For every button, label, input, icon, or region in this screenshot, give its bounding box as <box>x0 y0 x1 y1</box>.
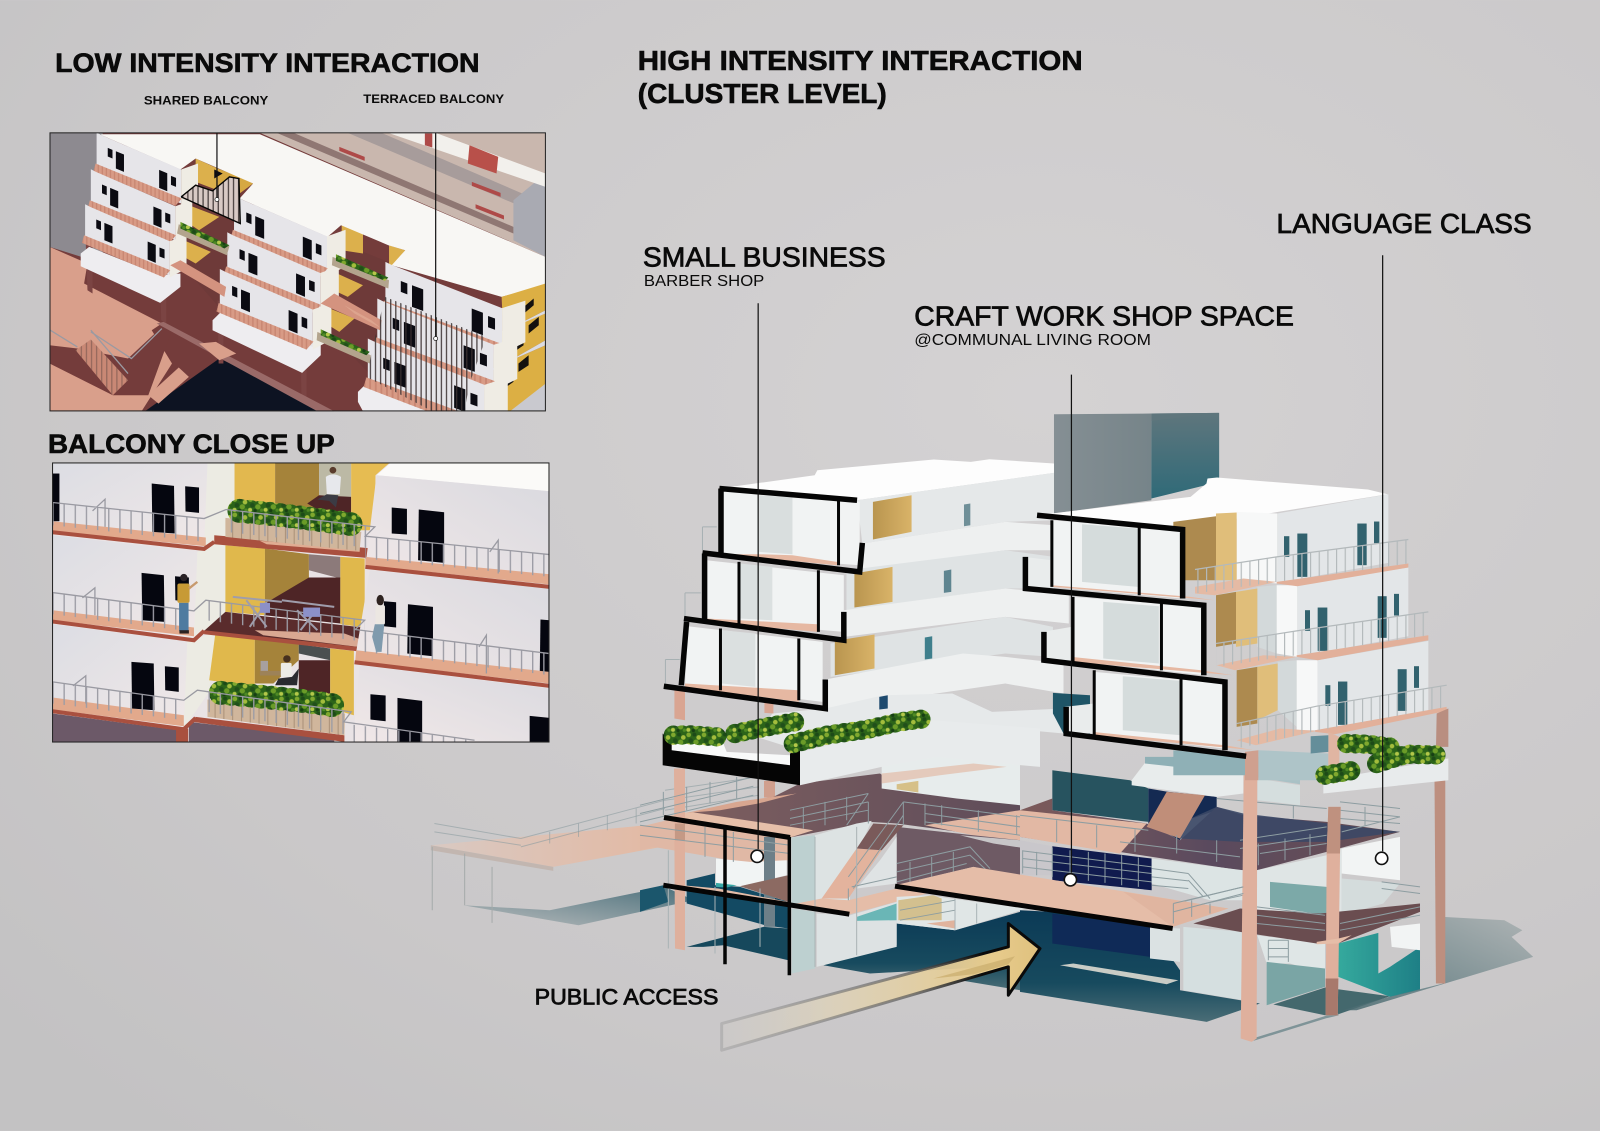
title: low intensity interaction: LOW INTENSITY INTERACTION <box>55 48 480 78</box>
thick section outlines <box>664 489 1246 756</box>
glass mullions <box>668 827 977 967</box>
label: small business: SMALL BUSINESS <box>643 242 886 273</box>
columns <box>1241 754 1257 1042</box>
leader line: language class <box>1376 255 1388 864</box>
terrace railings <box>1195 540 1447 749</box>
center bay 2 <box>225 545 265 615</box>
left block roof <box>719 459 1054 500</box>
lower structure: left half front <box>640 769 1243 1050</box>
floor bands <box>214 535 373 559</box>
yellow bays <box>196 159 218 190</box>
leader line: small business <box>751 303 763 862</box>
title: high intensity interaction: HIGH INTENSITY INTERACTION <box>638 45 1083 76</box>
center bay 3 <box>209 634 255 687</box>
windows and doors <box>53 474 550 743</box>
leader line: craft workshop <box>1064 375 1077 886</box>
columns and ledges <box>86 244 93 294</box>
right block rooms and section outlines <box>664 489 1254 756</box>
balcony floors <box>53 521 206 546</box>
person: meditating <box>317 467 341 508</box>
windows <box>1284 522 1419 725</box>
terrace columns <box>1436 709 1448 747</box>
planter: top <box>225 511 361 551</box>
title: high intensity interaction: (CLUSTER LEVEL) <box>638 78 887 109</box>
leader line: terraced balcony <box>434 110 438 341</box>
tower <box>1054 413 1219 514</box>
label: terraced balcony: TERRACED BALCONY <box>363 92 504 106</box>
hatch: shared balcony <box>181 177 240 224</box>
planters <box>177 224 229 255</box>
railings left <box>640 777 1020 920</box>
left walls <box>53 464 126 500</box>
right planter <box>1323 744 1448 794</box>
leader line: shared balcony <box>215 110 219 202</box>
title: balcony close up: BALCONY CLOSE UP <box>48 429 335 459</box>
right shadow <box>1342 777 1533 1010</box>
hatch: terraced balcony <box>366 297 486 411</box>
ghost railings, left block <box>665 527 717 684</box>
box 2 <box>1257 585 1277 654</box>
label: small business: BARBER SHOP <box>644 273 764 290</box>
left block rooms <box>722 490 860 565</box>
right block roof <box>1037 478 1387 529</box>
person: working at table <box>260 655 299 685</box>
person: standing waving <box>177 574 197 634</box>
panel: low intensity aerial view <box>50 132 546 412</box>
label: craft work shop space: @COMMUNAL LIVING ROOM <box>914 332 1151 349</box>
left walkway <box>431 777 759 925</box>
lower section of left block <box>756 694 1064 750</box>
panel: balcony close up render <box>53 463 550 743</box>
right block terraces and stepped walls <box>1173 494 1448 780</box>
title: high intensity interaction <box>638 45 1083 109</box>
railings: right half <box>1020 799 1420 962</box>
upper structure: residential floors <box>665 413 1387 750</box>
illustration: sectional axonometric building <box>431 255 1533 1050</box>
overhang <box>1132 763 1243 797</box>
terrace floors <box>1277 564 1408 586</box>
mid balconies <box>170 260 226 297</box>
stairs and walkways <box>76 340 128 395</box>
white roof <box>101 134 546 297</box>
lower structure: left half rear <box>640 737 1027 990</box>
label: public access: PUBLIC ACCESS <box>535 984 718 1009</box>
label: craft work shop space: CRAFT WORK SHOP SPACE <box>914 301 1294 332</box>
black deck edges <box>664 818 790 838</box>
planter: bottom <box>207 693 345 735</box>
right walls <box>377 464 550 491</box>
person: standing on phone <box>372 595 385 652</box>
overhang tint <box>1173 750 1245 775</box>
brown recess behind balconies <box>180 170 240 330</box>
clothes drying racks <box>233 597 334 630</box>
left planter and deck <box>663 719 1040 785</box>
arrow: public access <box>722 924 1040 1050</box>
left block walls <box>857 473 1054 544</box>
label: craft work shop space <box>914 301 1294 349</box>
label: language class: LANGUAGE CLASS <box>1277 208 1532 239</box>
label: small business <box>643 242 886 290</box>
label: shared balcony: SHARED BALCONY <box>144 93 268 107</box>
balcony railings <box>53 499 550 743</box>
column left <box>674 769 685 950</box>
gold side walls <box>502 284 545 320</box>
center bay 1 <box>234 463 275 504</box>
box 3 <box>1278 660 1297 727</box>
central deck <box>895 867 1228 927</box>
box 1 <box>1237 512 1277 584</box>
balcony units <box>94 133 198 206</box>
lower structure: right half <box>1020 754 1420 1042</box>
